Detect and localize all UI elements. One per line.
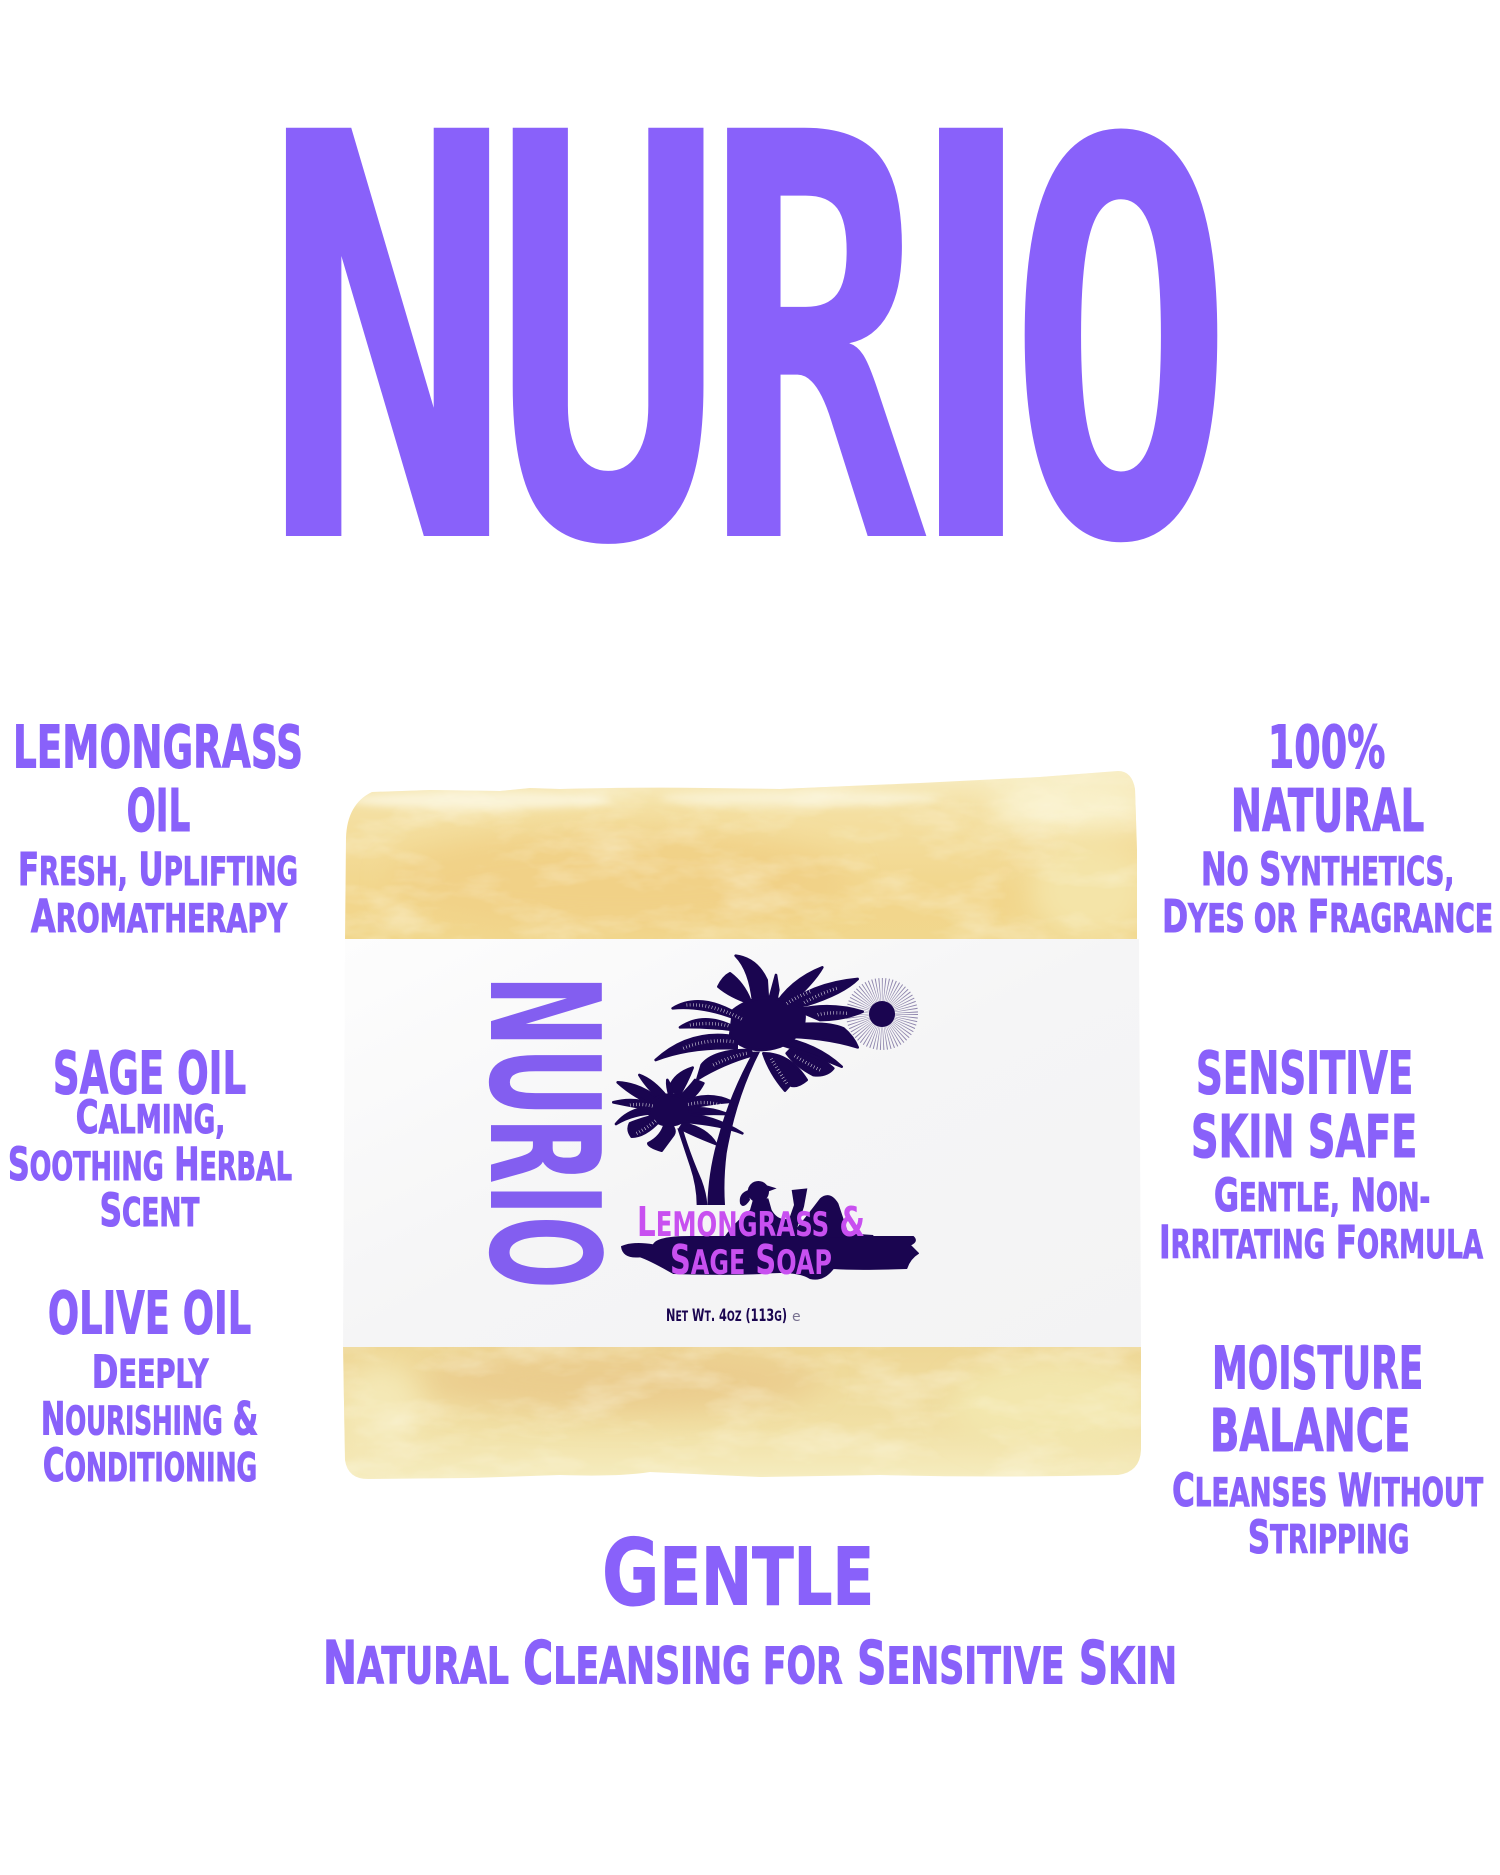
soap label wrap (343, 939, 1141, 1347)
panel: lemongrass oil: AROMATHERAPY (31, 889, 288, 943)
panel: lemongrass oil: OIL (127, 776, 190, 845)
label product name: LEMONGRASS & (637, 1198, 865, 1246)
panel: sage oil (8, 1038, 292, 1237)
title: NURIO: N (257, 17, 518, 668)
title: NURIO: U (493, 18, 723, 669)
panel: sage oil: SCENT (100, 1183, 200, 1237)
panel: 100% natural (1162, 712, 1493, 943)
label brand name NURIO: NURIO (455, 975, 632, 1289)
heading: OLIVE OIL (48, 1279, 251, 1348)
heading: 100% (1268, 712, 1385, 781)
label product name (637, 1198, 865, 1284)
label net weight: e (792, 1309, 801, 1325)
heading: SAGE OIL (53, 1038, 246, 1107)
label product name: SAGE SOAP (670, 1236, 832, 1284)
description: GENTLE, NON- (1214, 1168, 1430, 1222)
description: DEEPLY (92, 1344, 209, 1398)
subheading: NATURAL CLEANSING FOR SENSITIVE SKIN (323, 1628, 1177, 1698)
panel: olive oil: NOURISHING & (41, 1391, 258, 1445)
title: NURIO: O (1008, 26, 1234, 664)
panel: moisture balance (1172, 1333, 1483, 1564)
description: FRESH, UPLIFTING (18, 842, 298, 896)
soap lower part (343, 1347, 1141, 1479)
icon: palm trees, woman reading and island (613, 956, 918, 1279)
panel: olive oil (41, 1279, 258, 1492)
heading: GENTLE (602, 1520, 874, 1627)
panel: lemongrass oil (13, 712, 303, 943)
panel: sensitive skin safe (1159, 1038, 1483, 1269)
soap bar product (340, 770, 1150, 1485)
soap upper part (340, 770, 1150, 945)
icon: sun (858, 990, 906, 1038)
panel: moisture balance: STRIPPING (1248, 1510, 1409, 1564)
title: NURIO: I (908, 17, 1034, 669)
panel: gentle tagline (323, 1520, 1177, 1698)
panel: sage oil: SOOTHING HERBAL (8, 1137, 292, 1191)
title: NURIO (257, 17, 1234, 669)
description: CALMING, (76, 1090, 225, 1144)
title: NURIO: R (703, 17, 929, 669)
label net weight: NET WT. 4OZ (113G) (666, 1306, 787, 1326)
panel: olive oil: CONDITIONING (43, 1438, 257, 1492)
heading: LEMONGRASS (13, 712, 303, 781)
